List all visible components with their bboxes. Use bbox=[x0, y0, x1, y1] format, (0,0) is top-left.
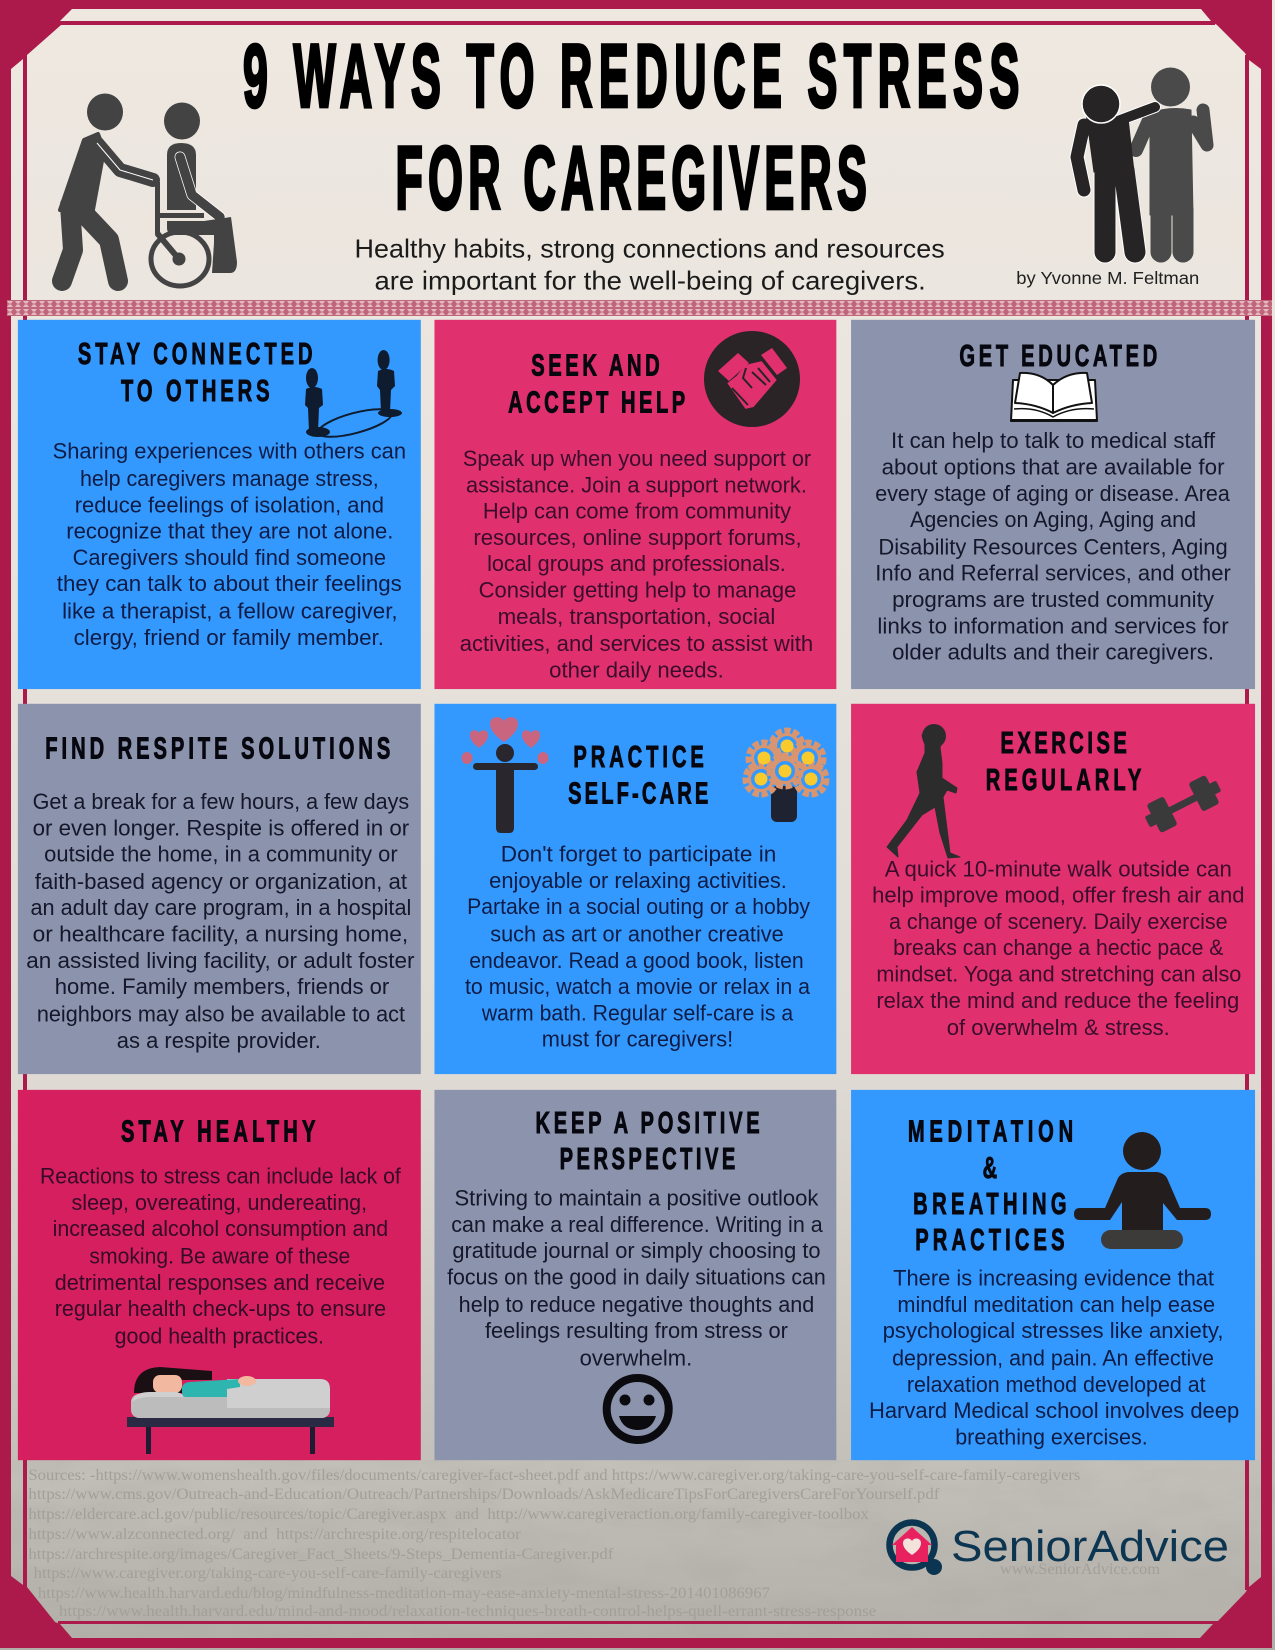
heading bbox=[568, 741, 708, 811]
body text bbox=[465, 842, 811, 1052]
body text: psychological stresses like anxiety, bbox=[883, 1318, 1223, 1343]
body text: or even longer. Respite is offered in or bbox=[33, 815, 410, 840]
panel: self-care bbox=[434, 704, 836, 1074]
body text bbox=[875, 428, 1231, 665]
body text: focus on the good in daily situations can bbox=[447, 1264, 826, 1289]
icon: open book bbox=[1011, 373, 1097, 422]
body text: Striving to maintain a positive outlook bbox=[454, 1186, 819, 1211]
body text: a change of scenery. Daily exercise bbox=[889, 909, 1228, 934]
body text: A quick 10-minute walk outside can bbox=[885, 856, 1232, 881]
body text: as a respite provider. bbox=[117, 1028, 321, 1053]
body text: relaxation method developed at bbox=[907, 1372, 1206, 1397]
body text: mindful meditation can help ease bbox=[897, 1292, 1215, 1317]
heading: & bbox=[983, 1152, 997, 1185]
body text: resources, online support forums, bbox=[473, 525, 802, 550]
heading: PRACTICES bbox=[915, 1224, 1065, 1257]
body text: warm bath. Regular self-care is a bbox=[481, 1000, 794, 1025]
body text: good health practices. bbox=[115, 1323, 324, 1348]
heading: PERSPECTIVE bbox=[560, 1143, 735, 1176]
body text: Help can come from community bbox=[483, 499, 792, 524]
body text: enjoyable or relaxing activities. bbox=[489, 868, 787, 893]
panel: get educated bbox=[851, 320, 1255, 689]
body text: an assisted living facility, or adult foster bbox=[26, 948, 415, 973]
body text: like a therapist, a fellow caregiver, bbox=[62, 599, 398, 624]
body text: or healthcare facility, a nursing home, bbox=[33, 922, 408, 947]
body text bbox=[869, 1266, 1239, 1449]
body text: Partake in a social outing or a hobby bbox=[467, 894, 811, 919]
body text: sleep, overeating, undereating, bbox=[72, 1190, 367, 1215]
sources: https://archrespite.org/images/Caregiver_Fact_Sheets/9-Steps_Dementia-Caregiver.pdf bbox=[28, 1544, 614, 1563]
body text bbox=[872, 856, 1245, 1040]
panel: seek help bbox=[434, 320, 836, 689]
icon: person in bed bbox=[127, 1367, 334, 1454]
body text: outside the home, in a community or bbox=[44, 842, 398, 867]
body text: Caregivers should find someone bbox=[73, 545, 386, 570]
body text: Disability Resources Centers, Aging bbox=[878, 534, 1228, 559]
body text: home. Family members, friends or bbox=[55, 974, 390, 999]
heading: SELF-CARE bbox=[568, 778, 708, 811]
body text: local groups and professionals. bbox=[487, 551, 786, 576]
body text: they can talk to about their feelings bbox=[57, 571, 402, 596]
sources: https://www.health.harvard.edu/mind-and-mood/relaxation-techniques-breath-control-helps-quell-errant-stress-response bbox=[59, 1601, 876, 1620]
body text: clergy, friend or family member. bbox=[74, 625, 384, 650]
body text: mindset. Yoga and stretching can also bbox=[876, 962, 1241, 987]
heading: TO OTHERS bbox=[121, 375, 270, 408]
body text: reduce feelings of isolation, and bbox=[75, 492, 384, 517]
body text: of overwhelm & stress. bbox=[947, 1015, 1170, 1040]
body text: Speak up when you need support or bbox=[463, 446, 812, 471]
body text: detrimental responses and receive bbox=[55, 1270, 385, 1295]
body text: assistance. Join a support network. bbox=[466, 472, 807, 497]
sources: https://www.cms.gov/Outreach-and-Education/Outreach/Partnerships/Downloads/AskMedicareTipsForCaregiversCareForYourself.pdf bbox=[28, 1484, 940, 1503]
body text: an adult day care program, in a hospital bbox=[31, 895, 411, 920]
sources: https://www.caregiver.org/taking-care-you-self-care-family-caregivers bbox=[34, 1563, 502, 1582]
body text: Info and Referral services, and other bbox=[875, 561, 1231, 586]
body text: recognize that they are not alone. bbox=[66, 519, 393, 544]
body text bbox=[460, 446, 813, 682]
body text: neighbors may also be available to act bbox=[37, 1001, 406, 1026]
body text: relax the mind and reduce the feeling bbox=[876, 988, 1239, 1013]
body text: breathing exercises. bbox=[955, 1424, 1148, 1449]
heading: FIND RESPITE SOLUTIONS bbox=[45, 733, 390, 766]
logo: SeniorAdvice bbox=[890, 1522, 1229, 1578]
icon: person with hearts bbox=[462, 717, 548, 833]
heading bbox=[78, 338, 313, 408]
body text: other daily needs. bbox=[549, 657, 724, 682]
panel: exercise bbox=[851, 704, 1255, 1074]
body text: about options that are available for bbox=[882, 454, 1225, 479]
heading: EXERCISE bbox=[1000, 727, 1127, 760]
panel: positive perspective bbox=[434, 1090, 836, 1460]
heading: SEEK AND bbox=[531, 350, 660, 383]
body text: Don't forget to participate in bbox=[501, 842, 776, 867]
heading: MEDITATION bbox=[908, 1115, 1073, 1149]
body text: Sharing experiences with others can bbox=[53, 439, 406, 464]
heading bbox=[908, 1115, 1073, 1257]
heading: GET EDUCATED bbox=[959, 340, 1157, 373]
panel: stay healthy bbox=[18, 1090, 421, 1460]
body text: Harvard Medical school involves deep bbox=[869, 1398, 1239, 1423]
body text: help improve mood, offer fresh air and bbox=[872, 883, 1245, 908]
body text: every stage of aging or disease. Area bbox=[875, 481, 1230, 506]
body text: help caregivers manage stress, bbox=[80, 466, 379, 491]
body text: meals, transportation, social bbox=[498, 604, 775, 629]
body text: must for caregivers! bbox=[542, 1027, 733, 1052]
body text bbox=[26, 789, 415, 1053]
icon: walking woman bbox=[887, 724, 960, 858]
body text: to music, watch a movie or relax in a bbox=[465, 974, 810, 999]
panel: stay connected bbox=[18, 320, 421, 689]
heading: STAY HEALTHY bbox=[121, 1115, 315, 1149]
logo: SeniorAdvice: www.SeniorAdvice.com bbox=[1000, 1561, 1160, 1578]
icon: dumbbell bbox=[1140, 772, 1226, 836]
body text bbox=[40, 1164, 401, 1348]
body text: There is increasing evidence that bbox=[893, 1266, 1215, 1291]
icon: smiley bbox=[607, 1378, 669, 1440]
sources bbox=[28, 1465, 1080, 1620]
body text: increased alcohol consumption and bbox=[53, 1216, 388, 1241]
icon: flowers in vase bbox=[746, 731, 826, 822]
icon: two friends bbox=[1077, 68, 1207, 252]
body text: faith-based agency or organization, at bbox=[35, 869, 408, 894]
heading: REGULARLY bbox=[986, 764, 1141, 797]
heading: STAY CONNECTED bbox=[78, 338, 313, 371]
subtitle: Healthy habits, strong connections and resources bbox=[355, 236, 945, 264]
sources: https://eldercare.acl.gov/public/resources/topic/Caregiver.aspx and http://www.caregiveraction.org/family-caregiver-toolbox bbox=[28, 1504, 869, 1523]
body text: Reactions to stress can include lack of bbox=[40, 1163, 401, 1188]
body text: regular health check-ups to ensure bbox=[55, 1296, 386, 1321]
subtitle: are important for the well-being of caregivers. bbox=[375, 267, 926, 295]
heading: BREATHING bbox=[913, 1188, 1067, 1221]
heading: KEEP A POSITIVE bbox=[535, 1107, 760, 1140]
body text: overwhelm. bbox=[580, 1345, 692, 1370]
icon: handshake bbox=[704, 331, 800, 427]
sources: Sources: -https://www.womenshealth.gov/files/documents/caregiver-fact-sheet.pdf and https://www.caregiver.org/taking-care-you-self-care-family-caregivers bbox=[28, 1465, 1080, 1484]
body text: such as art or another creative bbox=[490, 922, 784, 947]
body text: activities, and services to assist with bbox=[460, 631, 813, 656]
body text: Agencies on Aging, Aging and bbox=[910, 507, 1196, 532]
sources: https://www.health.harvard.edu/blog/mindfulness-meditation-may-ease-anxiety-mental-stress-201401086967 bbox=[38, 1583, 770, 1602]
title bbox=[243, 25, 1019, 227]
panel: respite bbox=[18, 704, 421, 1074]
sources: https://www.alzconnected.org/ and https://archrespite.org/respitelocator bbox=[28, 1524, 521, 1543]
body text bbox=[53, 439, 406, 650]
body text: help to reduce negative thoughts and bbox=[459, 1292, 814, 1317]
icon: people connected bbox=[305, 350, 402, 442]
body text: can make a real difference. Writing in a bbox=[451, 1212, 823, 1237]
subtitle bbox=[355, 236, 945, 295]
byline: by Yvonne M. Feltman bbox=[1016, 268, 1199, 288]
logo: SeniorAdvice: SeniorAdvice bbox=[951, 1522, 1229, 1571]
body text bbox=[447, 1186, 826, 1370]
body text: smoking. Be aware of these bbox=[89, 1243, 350, 1268]
icon: caregiver pushing wheelchair bbox=[60, 94, 237, 286]
divider band bbox=[7, 300, 1272, 316]
heading bbox=[508, 350, 685, 419]
body text: gratitude journal or simply choosing to bbox=[452, 1238, 821, 1263]
panel: meditation bbox=[851, 1090, 1255, 1460]
body text: feelings resulting from stress or bbox=[485, 1318, 788, 1343]
body text: older adults and their caregivers. bbox=[892, 640, 1214, 665]
body text: Consider getting help to manage bbox=[479, 578, 796, 603]
heading: PRACTICE bbox=[573, 741, 704, 774]
body text: Get a break for a few hours, a few days bbox=[33, 789, 409, 814]
body text: It can help to talk to medical staff bbox=[891, 428, 1216, 453]
icon: meditating figure bbox=[1074, 1132, 1211, 1249]
title: 9 WAYS TO REDUCE STRESS bbox=[243, 25, 1019, 125]
heading bbox=[986, 727, 1141, 797]
title: FOR CAREGIVERS bbox=[396, 127, 867, 227]
body text: depression, and pain. An effective bbox=[892, 1345, 1214, 1370]
body text: breaks can change a hectic pace & bbox=[893, 935, 1223, 960]
heading: ACCEPT HELP bbox=[508, 386, 685, 419]
body text: programs are trusted community bbox=[892, 587, 1215, 612]
body text: links to information and services for bbox=[877, 613, 1229, 638]
body text: endeavor. Read a good book, listen bbox=[469, 948, 804, 973]
heading bbox=[535, 1107, 760, 1176]
